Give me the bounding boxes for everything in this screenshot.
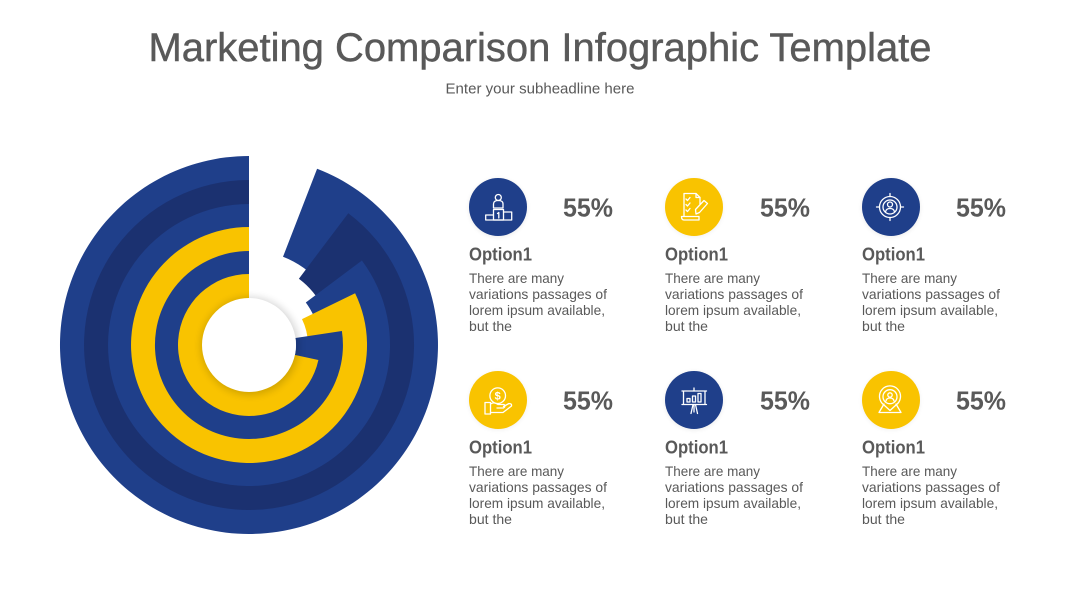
description: lorem ipsum available, [469,302,605,318]
icon: location pin person [862,371,920,430]
ring 4: yellow [131,227,367,463]
option heading: Option1 [862,244,925,264]
description: There are many [665,270,760,286]
option card 6 [862,371,1006,527]
option heading: Option1 [665,244,728,264]
description: but the [665,318,708,334]
icon: coin in hand [469,371,527,430]
percentage: 55% [956,386,1006,416]
option heading: Option1 [469,438,532,458]
description: but the [862,511,905,527]
percentage: 55% [760,192,810,222]
description: lorem ipsum available, [469,495,605,511]
percentage: 55% [956,192,1006,222]
description: There are many [665,463,760,479]
centre hole [202,298,296,392]
ring 1: outer blue [60,156,438,534]
radial bar chart [60,156,438,534]
icon: presentation board [665,371,723,430]
percentage: 55% [563,386,613,416]
ring 5: blue [155,251,343,439]
description: variations passages of [862,479,1000,495]
subheadline: Enter your subheadline here [446,82,634,98]
icon: checklist and pencil [665,178,723,237]
description: There are many [469,270,564,286]
option card 4 [469,371,613,527]
icon: coin in hand: $ [495,390,501,402]
ring 2: dark blue [84,180,414,510]
ring 6: yellow [178,274,318,416]
centre hole shadow [201,297,299,395]
description: There are many [469,463,564,479]
description: There are many [862,270,957,286]
description: variations passages of [665,479,803,495]
icon: podium [469,178,527,237]
description: but the [469,511,512,527]
description: variations passages of [862,286,1000,302]
description: lorem ipsum available, [862,495,998,511]
description: variations passages of [469,479,607,495]
option heading: Option1 [665,438,728,458]
option card 1 [469,178,613,334]
description: lorem ipsum available, [862,302,998,318]
description: but the [862,318,905,334]
description: There are many [862,463,957,479]
icon: target person [862,178,920,237]
description: but the [469,318,512,334]
percentage: 55% [563,192,613,222]
description: lorem ipsum available, [665,495,801,511]
description: lorem ipsum available, [665,302,801,318]
percentage: 55% [760,386,810,416]
option card 5 [665,371,810,527]
description: but the [665,511,708,527]
option card 3 [862,178,1006,334]
description: variations passages of [469,286,607,302]
ring 3: blue [108,204,390,486]
option heading: Option1 [862,438,925,458]
description: variations passages of [665,286,803,302]
option heading: Option1 [469,244,532,264]
option card 2 [665,178,810,334]
title: Marketing Comparison Infographic Template [148,26,932,70]
